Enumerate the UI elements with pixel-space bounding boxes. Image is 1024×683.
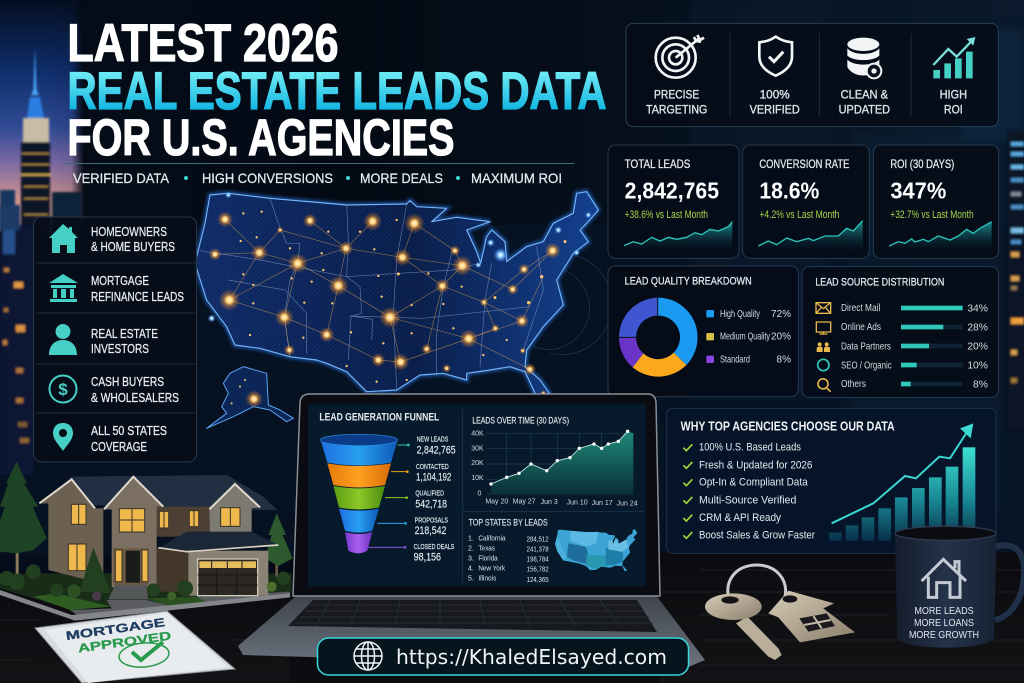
group: why panel, keys and mug (667, 408, 1024, 660)
house key (705, 593, 782, 660)
top states table: TOP STATES BY LEADS (469, 518, 548, 528)
mortgage approved paper (35, 611, 235, 683)
entry steps (108, 585, 148, 599)
row: others (841, 379, 988, 391)
panel: lead quality breakdown: LEAD QUALITY BREAKDOWN (625, 276, 752, 288)
porch (113, 548, 148, 585)
top states table: 4. (468, 566, 474, 573)
mug (895, 526, 1024, 648)
label: homeowners: & HOME BUYERS (91, 240, 175, 254)
row: online ads: 28% (967, 323, 988, 334)
mug slogan: MORE LOANS (914, 618, 974, 629)
top states table: Florida (478, 556, 498, 563)
label: mortgage: REFINANCE LEADS (91, 290, 184, 304)
leads over time chart: May 20 (485, 498, 508, 505)
icon: seo (818, 359, 829, 371)
map outline (195, 192, 598, 397)
east coast radar arcs (533, 255, 612, 355)
row: online ads: Online Ads (841, 322, 881, 333)
left city buildings (0, 205, 34, 475)
donut legend (706, 309, 791, 366)
leads over time chart: Jun 3 (541, 499, 558, 506)
garage door (198, 559, 258, 596)
row: others: Others (841, 379, 866, 390)
shrubs (0, 547, 290, 601)
top states table: New York (478, 566, 505, 573)
house body (39, 475, 278, 599)
network lines (215, 219, 553, 369)
funnel connector lines (368, 444, 410, 549)
right tree (265, 513, 293, 577)
label: cash buyers: & WHOLESALERS (91, 391, 179, 405)
rising bars (829, 447, 975, 541)
KPI: ROI: 347% (890, 177, 946, 203)
KPI: conversion rate (743, 145, 869, 258)
leads over time chart: 10K (471, 475, 484, 482)
northeast blue lights (208, 192, 592, 322)
desk surface (0, 552, 1024, 683)
KPI: conversion rate: +4.2% vs Last Month (759, 209, 839, 221)
funnel values: 542,718 (415, 498, 447, 510)
map: glowing U.S. network (195, 192, 612, 428)
funnel heading: LEAD GENERATION FUNNEL (319, 412, 440, 424)
label: verified: 100% (760, 87, 790, 101)
leads over time chart: 20K (471, 460, 484, 467)
donut chart (619, 298, 698, 377)
label: precise targeting: PRECISE (654, 87, 699, 101)
icon: partners (817, 347, 830, 352)
funnel values: 1,104,192 (416, 472, 451, 484)
keyboard (288, 600, 657, 632)
row: online ads (841, 322, 988, 334)
label: high roi: ROI (944, 102, 963, 116)
leads over time chart: May 27 (513, 499, 536, 506)
donut legend: Medium Quality (720, 332, 770, 343)
leads over time chart: 40K (471, 431, 484, 438)
title line 1: LATEST 2026 (68, 14, 338, 73)
checklist: CRM & API Ready (699, 512, 781, 524)
label: high roi: HIGH (940, 87, 967, 101)
checklist: 100% U.S. Based Leads (699, 442, 801, 454)
top states table: 198,784 (527, 557, 549, 564)
panel: why top agencies: WHY TOP AGENCIES CHOOSE OUR DATA (681, 420, 895, 434)
checklist: Multi-Source Verified (699, 494, 796, 506)
laptop (238, 394, 705, 668)
panel: why top agencies (667, 408, 996, 553)
leads over time chart: Jun 24 (617, 500, 638, 507)
right city windows (1008, 130, 1024, 430)
front door (126, 551, 140, 583)
KPI: total leads: 2,842,765 (625, 177, 719, 203)
row: others: 8% (973, 380, 988, 391)
donut legend: 8% (777, 355, 791, 366)
top states table: 284,512 (527, 536, 549, 543)
KPI: total leads: TOTAL LEADS (625, 158, 691, 171)
icon: growth chart (933, 37, 975, 78)
tagline (64, 163, 574, 186)
KPI: conversion rate: 18.6% (759, 177, 819, 203)
row: data partners: Data Partners (841, 341, 891, 352)
title line 2: REAL ESTATE LEADS DATA (68, 62, 606, 121)
funnel values: CLOSED DEALS (414, 542, 454, 551)
icon: database (847, 38, 881, 78)
funnel values (414, 435, 456, 564)
alaska (207, 367, 293, 428)
left night skyline (0, 0, 84, 232)
URL pill (318, 638, 688, 675)
checklist: Opt-In & Compliant Data (699, 477, 808, 489)
url text: https://KhaledElsayed.com (396, 645, 667, 669)
paper stamp: APPROVED (77, 629, 172, 656)
row: seo organic: SEO / Organic (841, 360, 892, 371)
row: direct mail: 34% (967, 304, 988, 315)
donut legend: High Quality (720, 309, 760, 320)
top states table (468, 518, 549, 584)
label: cash buyers: CASH BUYERS (91, 375, 164, 389)
label: investors: REAL ESTATE (91, 327, 158, 341)
lit windows (68, 504, 240, 582)
top states table: 124,365 (527, 577, 549, 584)
funnel values: CONTACTED (416, 462, 449, 471)
icon: mail (816, 303, 831, 313)
leads over time chart: LEADS OVER TIME (30 DAYS) (472, 415, 569, 425)
laptop base (238, 590, 705, 668)
mug house icon (922, 559, 966, 597)
house scene (0, 462, 293, 621)
row: data partners: 20% (967, 342, 988, 353)
leads over time chart: Jun 17 (592, 500, 613, 507)
leads over time chart: Jun 10 (567, 500, 588, 507)
leads over time chart (471, 415, 638, 507)
row: seo organic: 10% (967, 361, 988, 372)
donut legend: Standard (720, 355, 750, 366)
label: mortgage: MORTGAGE (91, 274, 149, 288)
funnel values: QUALIFIED (415, 489, 444, 498)
label: homeowners: HOMEOWNERS (91, 225, 167, 239)
leads over time chart: 30K (471, 445, 484, 452)
label: investors: INVESTORS (91, 342, 149, 356)
small nodes (239, 210, 566, 383)
icon: house (49, 224, 78, 253)
top states table: Illinois (478, 576, 497, 583)
checklist (683, 442, 815, 541)
laptop lid (293, 394, 660, 596)
state borders (200, 198, 543, 390)
check seal (118, 641, 170, 669)
mug slogan: MORE GROWTH (909, 630, 979, 641)
top states mini map (555, 530, 638, 572)
donut legend: 20% (771, 332, 791, 343)
growth arrow (832, 423, 973, 523)
tagline: MAXIMUM ROI (471, 170, 562, 186)
top states table: 3. (468, 556, 474, 563)
panel: audience categories (34, 217, 196, 462)
checklist: Boost Sales & Grow Faster (699, 529, 815, 541)
top states table: Texas (478, 545, 495, 552)
paper heading: MORTGAGE (65, 615, 166, 643)
KPI: ROI: +32.7% vs Last Month (890, 209, 974, 221)
panel group: KPI and breakdown dashboards (608, 145, 999, 397)
title line 3: FOR U.S. AGENCIES (68, 109, 454, 166)
house keychain (768, 591, 855, 642)
top states table: 5. (468, 576, 474, 583)
keys (705, 565, 855, 660)
label: precise targeting: TARGETING (646, 102, 707, 116)
icon: dollar (50, 376, 76, 402)
label: verified: VERIFIED (750, 102, 800, 116)
funnel chart (320, 434, 398, 553)
funnel values: NEW LEADS (417, 435, 448, 444)
tagline: MORE DEALS (360, 170, 443, 186)
icon: globe (354, 642, 382, 670)
row: seo organic (841, 360, 988, 372)
funnel values: PROPOSALS (415, 515, 448, 524)
funnel values: 218,542 (415, 525, 446, 537)
KPI: ROI: ROI (30 DAYS) (890, 158, 954, 171)
row: data partners (818, 341, 988, 353)
top states table: 2. (468, 545, 474, 552)
row: direct mail (841, 303, 988, 315)
panel: lead source distribution: LEAD SOURCE DISTRIBUTION (815, 276, 944, 288)
icon: shield (759, 37, 792, 76)
laptop screen (308, 403, 646, 587)
top states table: 241,378 (527, 546, 549, 553)
panel: lead quality breakdown (608, 266, 798, 397)
icon: bank (49, 274, 78, 302)
lawn platform (0, 573, 292, 621)
label: clean updated: UPDATED (839, 102, 890, 116)
top states table: California (478, 535, 506, 542)
tagline: VERIFIED DATA (73, 170, 170, 186)
city lights (209, 211, 561, 397)
KPI: ROI (873, 145, 999, 258)
top states table: 1. (468, 535, 474, 542)
panel: feature badges (626, 23, 998, 127)
icon: target (656, 35, 704, 78)
row: direct mail: Direct Mail (841, 303, 880, 314)
icon: location pin (53, 423, 73, 451)
checklist: Fresh & Updated for 2026 (699, 459, 812, 471)
panel: lead source distribution (802, 267, 999, 397)
leads over time chart: 0 (477, 490, 481, 497)
funnel values: 98,156 (414, 552, 441, 564)
donut legend: 72% (771, 309, 791, 320)
icon: monitor (816, 322, 831, 334)
tagline: HIGH CONVERSIONS (202, 170, 333, 186)
mug slogan: MORE LEADS (914, 606, 974, 617)
KPI: total leads (608, 145, 739, 258)
icon: dollar: $ (58, 380, 68, 399)
left tree (0, 462, 47, 577)
icon: investor (49, 324, 77, 355)
funnel values: 2,842,765 (417, 445, 456, 457)
top states table: 156,782 (527, 567, 549, 574)
KPI: total leads: +38.6% vs Last Month (625, 209, 708, 221)
label: clean updated: CLEAN & (841, 87, 889, 101)
label: coverage: COVERAGE (91, 440, 147, 454)
title (68, 14, 606, 166)
icon: search (818, 379, 831, 392)
KPI: conversion rate: CONVERSION RATE (759, 158, 850, 171)
label: coverage: ALL 50 STATES (91, 424, 167, 438)
